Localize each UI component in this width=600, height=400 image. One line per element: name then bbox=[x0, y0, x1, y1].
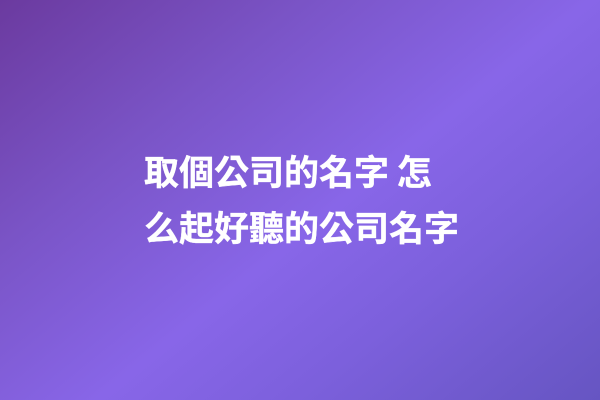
title bbox=[144, 154, 459, 249]
title: 么起好聽的公司名字 bbox=[144, 210, 459, 249]
title: 取個公司的名字 怎 bbox=[144, 154, 432, 193]
